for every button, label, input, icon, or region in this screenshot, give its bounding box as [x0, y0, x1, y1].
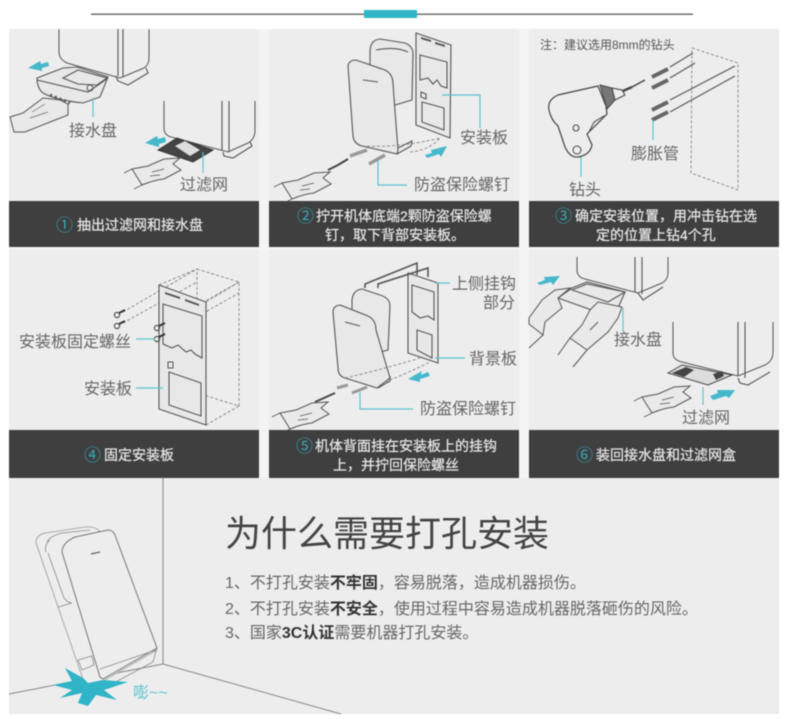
label: anchor: 膨胀管	[631, 145, 679, 163]
dashed wall	[691, 48, 738, 190]
caption bar: step 3	[529, 201, 779, 247]
leader: security screw	[360, 392, 413, 409]
caption bar: step 4: ④	[84, 446, 101, 465]
dashed path	[362, 138, 440, 152]
dryer base, upper	[59, 29, 149, 85]
back plate	[408, 273, 438, 363]
label: back plate: 背景板	[469, 350, 517, 368]
dashed wall box	[123, 269, 239, 425]
label: security screw: 防盗保险螺钉	[414, 176, 510, 194]
panel: step 3	[529, 29, 779, 201]
leader: plate	[442, 95, 480, 128]
leader: plate	[136, 387, 163, 389]
room corner lines	[9, 478, 341, 714]
dryer base, lower	[164, 101, 255, 158]
caption bar: step 1	[9, 201, 259, 247]
header rule with teal tab	[91, 10, 693, 18]
front dryer	[348, 48, 412, 154]
panel: step 6	[529, 250, 779, 430]
reasons list: 1、不打孔安装不牢固，容易脱落，造成机器损伤。	[225, 574, 586, 592]
leader: filter	[202, 152, 204, 173]
screws	[350, 150, 385, 164]
leader: drill bit	[580, 157, 582, 177]
caption bar: step 3: ③	[555, 207, 572, 226]
screws	[114, 310, 165, 342]
caption bar: step 5: 上，并拧回保险螺丝	[333, 457, 459, 473]
label: drill bit: 钻头	[569, 181, 601, 199]
leader: filter	[702, 387, 704, 405]
label: fixing screw: 安装板固定螺丝	[19, 333, 131, 351]
icon: drill	[549, 80, 645, 157]
illustration: fallen dryer	[36, 527, 157, 686]
filter drawer	[158, 138, 213, 162]
caption bar: step 2	[269, 201, 519, 247]
drip tray	[37, 67, 108, 103]
heading: 为什么需要打孔安装	[225, 513, 549, 554]
icon: hand with screwdriver	[272, 402, 329, 433]
note: 注：建议选用8mm的钻头	[540, 37, 675, 52]
leader: hook	[435, 282, 450, 284]
caption bar: step 5: 机体背面挂在安装板上的挂钩	[315, 438, 497, 454]
icon: hand with screwdriver	[274, 172, 331, 203]
icon: hand pulling tray	[10, 95, 70, 132]
sound effect: 嘭~~	[133, 684, 168, 702]
leader: tray	[92, 98, 94, 117]
icon: hand pulling filter	[124, 158, 181, 189]
front dryer	[333, 305, 390, 388]
label: filter: 过滤网	[682, 409, 730, 427]
anchors with guide lines	[652, 53, 735, 120]
panel: step 4	[9, 250, 259, 430]
rear dryer	[370, 39, 413, 105]
label: filter: 过滤网	[180, 176, 228, 194]
drip tray	[558, 282, 625, 313]
leader: tray	[622, 308, 624, 332]
leader: anchor	[652, 120, 654, 140]
icon: impact burst	[53, 668, 128, 706]
caption bar: step 2: 拧开机体底端2颗防盗保险螺	[316, 208, 492, 224]
icon: left hand	[529, 288, 570, 348]
arrow: insert tray	[537, 276, 560, 285]
leader: fixing screw	[136, 338, 155, 340]
screws	[337, 385, 367, 393]
screwdriver	[315, 393, 335, 402]
leader: back plate	[435, 357, 465, 359]
panel: step 2	[269, 29, 519, 203]
dryer base, lower	[673, 322, 773, 385]
label: tray: 接水盘	[69, 121, 117, 140]
arrow: pull out filter	[145, 136, 166, 147]
label: plate: 安装板	[84, 380, 132, 398]
caption bar: step 1: 抽出过滤网和接水盘	[77, 217, 203, 233]
panel: step 5	[269, 250, 519, 433]
caption bar: step 6: 装回接水盘和过滤网盒	[596, 447, 736, 463]
arrow: remove plate	[425, 146, 447, 158]
caption bar: step 6: ⑥	[576, 446, 593, 465]
arrow: insert filter	[710, 390, 735, 400]
arrow: pull out tray	[28, 61, 49, 71]
label: hook: 上侧挂钩	[452, 275, 516, 293]
icon: right hand	[558, 302, 622, 367]
hook guides	[365, 263, 428, 288]
reasons list: 3、国家3C认证需要机器打孔安装。	[225, 624, 478, 642]
caption bar: step 2: ②	[297, 207, 314, 226]
mounting plate	[416, 33, 451, 138]
mounting plate	[159, 285, 206, 425]
panel: why drill	[9, 478, 779, 714]
label: hook	[452, 275, 516, 312]
caption bar: step 4	[9, 430, 259, 478]
caption bar: step 2: 钉，取下背部安装板。	[325, 227, 465, 243]
dryer base, upper	[577, 257, 668, 300]
label: tray: 接水盘	[614, 330, 662, 349]
caption bar: step 5	[269, 430, 519, 478]
label: hook: 部分	[483, 294, 515, 312]
screwdriver	[328, 159, 348, 170]
reasons list: 2、不打孔安装不安全，使用过程中容易造成机器脱落砸伤的风险。	[225, 599, 698, 618]
icon: hand inserting filter	[634, 386, 691, 417]
caption bar: step 3: 定的位置上钻4个孔	[596, 227, 716, 243]
caption bar: step 5: ⑤	[296, 437, 313, 456]
caption bar: step 4: 固定安装板	[104, 447, 174, 463]
panel: step 1	[9, 29, 259, 201]
arrow: towards wall	[408, 371, 430, 382]
caption bar: step 1: ①	[56, 216, 73, 235]
filter drawer	[668, 365, 732, 385]
dashed path	[345, 358, 430, 382]
rear dryer	[352, 289, 390, 355]
caption bar: step 6	[529, 430, 779, 478]
label: security screw: 防盗保险螺钉	[420, 400, 516, 418]
leader: security screw	[378, 160, 407, 185]
reasons list	[225, 574, 698, 642]
caption bar: step 3: 确定安装位置，用冲击钻在选	[575, 208, 757, 224]
label: plate: 安装板	[460, 129, 508, 147]
